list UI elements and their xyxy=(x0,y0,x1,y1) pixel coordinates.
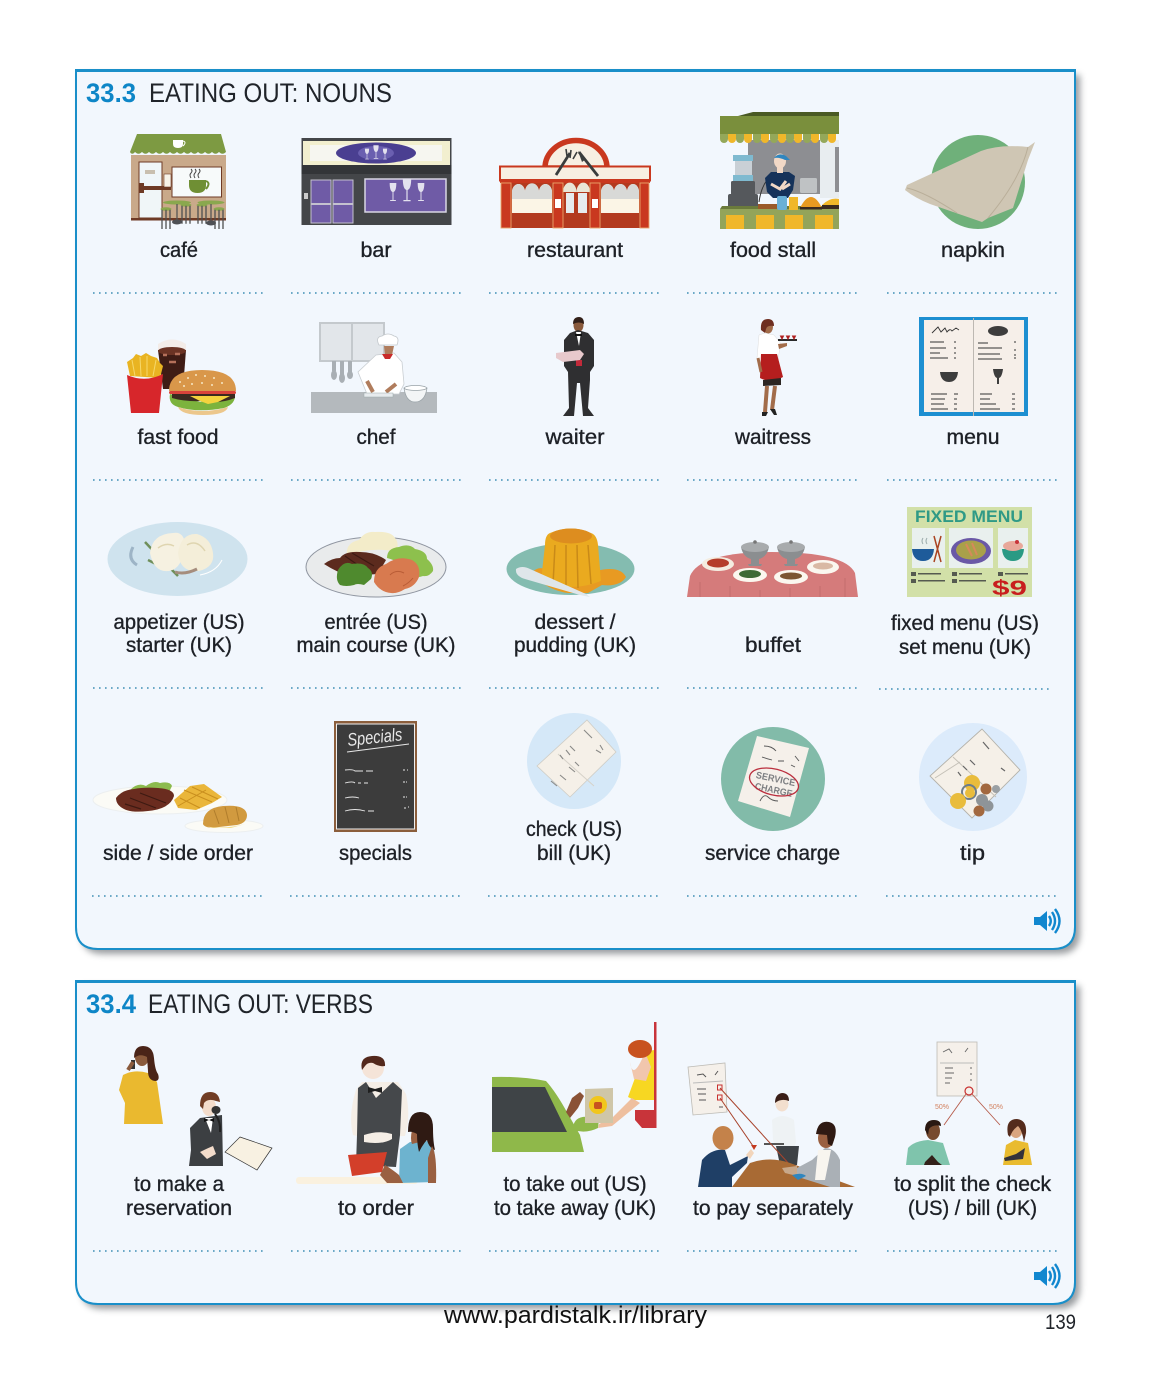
label: appetizer / starter: starter (UK) xyxy=(126,634,232,657)
panel: 33.3 eating out nouns xyxy=(75,69,1080,954)
label: to take out / to take away: to take away (UK) xyxy=(494,1197,656,1220)
icon: bar xyxy=(302,138,452,225)
icon: waitress xyxy=(757,319,797,416)
label: to pay separately: to pay separately xyxy=(693,1197,853,1220)
label: buffet: buffet xyxy=(745,634,801,657)
label: to make a reservation: to make a xyxy=(134,1173,224,1196)
icon: to make a reservation xyxy=(119,1046,272,1170)
icon: chef xyxy=(311,323,437,413)
label: tip: tip xyxy=(960,842,985,865)
icon: waiter xyxy=(556,317,594,416)
icon: dessert xyxy=(506,528,634,597)
icon: napkin xyxy=(905,135,1035,229)
label: specials: specials xyxy=(339,842,412,865)
heading: 33.4 eating out verbs xyxy=(86,989,373,1019)
icon: to order xyxy=(296,1056,436,1184)
icon: to split the check: 50% xyxy=(935,1104,949,1111)
label: check / bill xyxy=(526,818,622,865)
label: restaurant: restaurant xyxy=(527,239,623,262)
icon: check xyxy=(527,713,621,809)
label: side / side order: side / side order xyxy=(103,842,253,865)
icon: service charge: CHARGE xyxy=(754,781,793,800)
icon: service charge: SERVICE xyxy=(755,770,796,789)
label: bar: bar xyxy=(360,239,392,262)
icon: entrée xyxy=(306,532,446,597)
icon: audio speaker xyxy=(1034,909,1060,933)
label: entrée / main course: main course (UK) xyxy=(296,634,456,657)
heading: 33.4 eating out verbs: EATING OUT: VERBS xyxy=(148,989,373,1019)
icon: fixed menu xyxy=(907,507,1032,600)
label: to make a reservation xyxy=(126,1173,232,1220)
heading: 33.3 eating out nouns: EATING OUT: NOUNS xyxy=(149,78,392,108)
icon: café xyxy=(130,134,226,229)
label: to order: to order xyxy=(338,1197,414,1220)
label: dessert / pudding: dessert / xyxy=(534,611,616,634)
dotted lines: verbs row xyxy=(93,1250,1060,1252)
label: to take out / to take away: to take out (US) xyxy=(504,1173,646,1196)
label: fixed menu / set menu: set menu (UK) xyxy=(899,636,1031,659)
icon: to pay separately xyxy=(688,1063,855,1187)
label: napkin: napkin xyxy=(941,239,1005,262)
icon: fast food xyxy=(127,340,236,415)
icon: specials xyxy=(334,721,417,832)
windows xyxy=(512,183,639,213)
icon: to split the check xyxy=(906,1042,1032,1165)
label: waitress: waitress xyxy=(734,426,811,449)
dotted lines: row 4 xyxy=(92,895,1059,897)
icon: appetizer xyxy=(108,522,248,596)
label: to split the check xyxy=(894,1173,1051,1220)
icon: tip xyxy=(919,723,1027,831)
label: fast food: fast food xyxy=(138,426,218,449)
label: food stall: food stall xyxy=(730,239,816,262)
label: service charge: service charge xyxy=(705,842,840,865)
heading: 33.4 eating out verbs: 33.4 xyxy=(86,989,136,1019)
label: entrée / main course: entrée (US) xyxy=(324,611,428,634)
icon: fixed menu: FIXED MENU xyxy=(915,508,1023,526)
icon: service charge xyxy=(721,727,825,831)
page number: 139 xyxy=(1045,1311,1076,1334)
label: to make a reservation: reservation xyxy=(126,1197,232,1220)
label: to take out / to take away xyxy=(494,1173,656,1220)
icon: audio speaker xyxy=(1034,1264,1060,1288)
icon: specials: Specials xyxy=(346,724,403,750)
icon: food stall xyxy=(720,112,839,229)
icon: fixed menu: $9 xyxy=(992,577,1027,600)
icon: side order xyxy=(93,782,263,832)
icon: to take out xyxy=(492,1022,656,1152)
icon: menu xyxy=(919,317,1028,416)
label: dessert / pudding: pudding (UK) xyxy=(514,634,636,657)
icon: to split the check: 50% xyxy=(989,1104,1003,1111)
label: waiter: waiter xyxy=(544,426,604,449)
icon: restaurant xyxy=(500,141,650,228)
label: appetizer / starter: appetizer (US) xyxy=(114,611,244,634)
label: appetizer / starter xyxy=(114,611,244,657)
label: check / bill: bill (UK) xyxy=(537,842,611,865)
panel: 33.4 eating out verbs xyxy=(75,980,1080,1309)
label: menu: menu xyxy=(946,426,1000,449)
label: fixed menu / set menu: fixed menu (US) xyxy=(891,612,1039,635)
label: entrée / main course xyxy=(296,611,456,657)
label: to split the check: to split the check xyxy=(894,1173,1051,1196)
label: café: café xyxy=(160,239,198,262)
dotted lines: row 2 xyxy=(93,479,1060,481)
label: fixed menu / set menu xyxy=(891,612,1039,659)
icon: buffet xyxy=(687,540,858,597)
label: chef: chef xyxy=(356,426,396,449)
label: to split the check: (US) / bill (UK) xyxy=(908,1197,1037,1220)
heading: 33.3 eating out nouns: 33.3 xyxy=(86,78,136,108)
dotted lines: row 3 xyxy=(93,688,1052,689)
footer: website url: www.pardistalk.ir/library xyxy=(443,1302,707,1329)
label: check / bill: check (US) xyxy=(526,818,622,841)
label: dessert / pudding xyxy=(514,611,636,657)
dotted lines: row 1 xyxy=(93,292,1060,294)
